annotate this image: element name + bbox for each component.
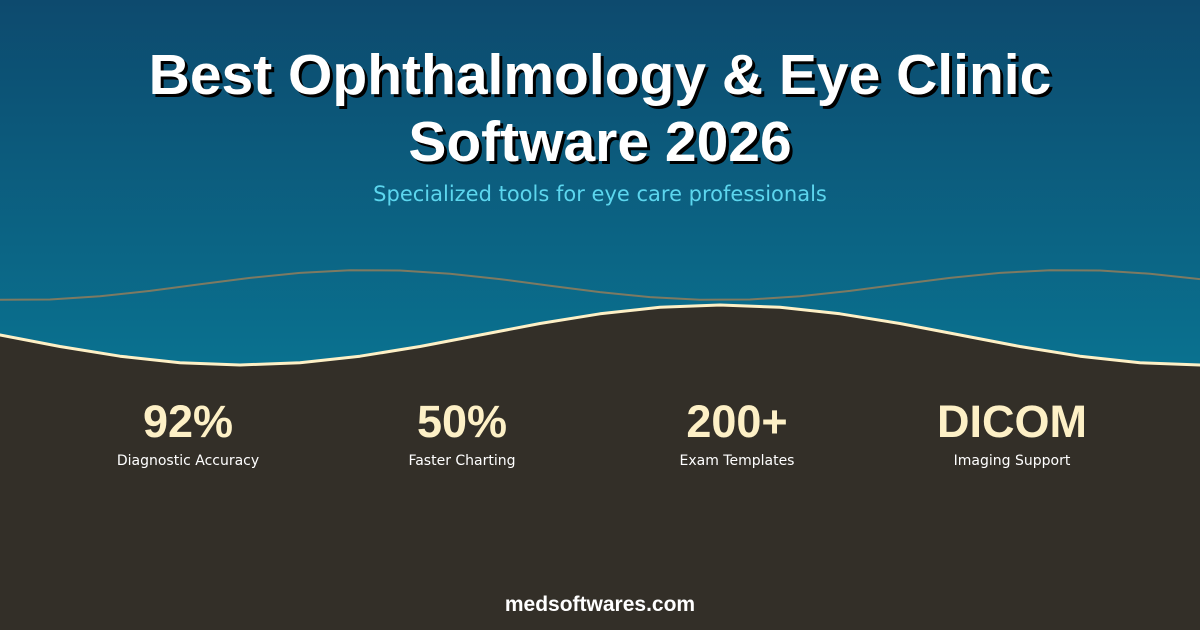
footer: medsoftwares.com bbox=[505, 593, 695, 616]
stat: dicom: DICOM bbox=[937, 396, 1087, 447]
stat: accuracy: 92% bbox=[143, 396, 233, 447]
stat: charting bbox=[408, 396, 516, 469]
stat: templates: 200+ bbox=[686, 396, 788, 447]
stat: charting: 50% bbox=[417, 396, 507, 447]
title: Best Ophthalmology & Eye Clinic bbox=[149, 43, 1051, 107]
stat: dicom: Imaging Support bbox=[954, 453, 1070, 469]
stat: templates: Exam Templates bbox=[680, 453, 794, 469]
title bbox=[149, 43, 1053, 174]
stat: accuracy bbox=[117, 396, 259, 469]
subtitle: Specialized tools for eye care professionals bbox=[373, 182, 827, 206]
stat: templates bbox=[680, 396, 794, 469]
stat: accuracy: Diagnostic Accuracy bbox=[117, 453, 259, 469]
stat: dicom bbox=[937, 396, 1087, 469]
title: Software 2026 bbox=[408, 110, 792, 174]
stat: charting: Faster Charting bbox=[408, 453, 516, 469]
